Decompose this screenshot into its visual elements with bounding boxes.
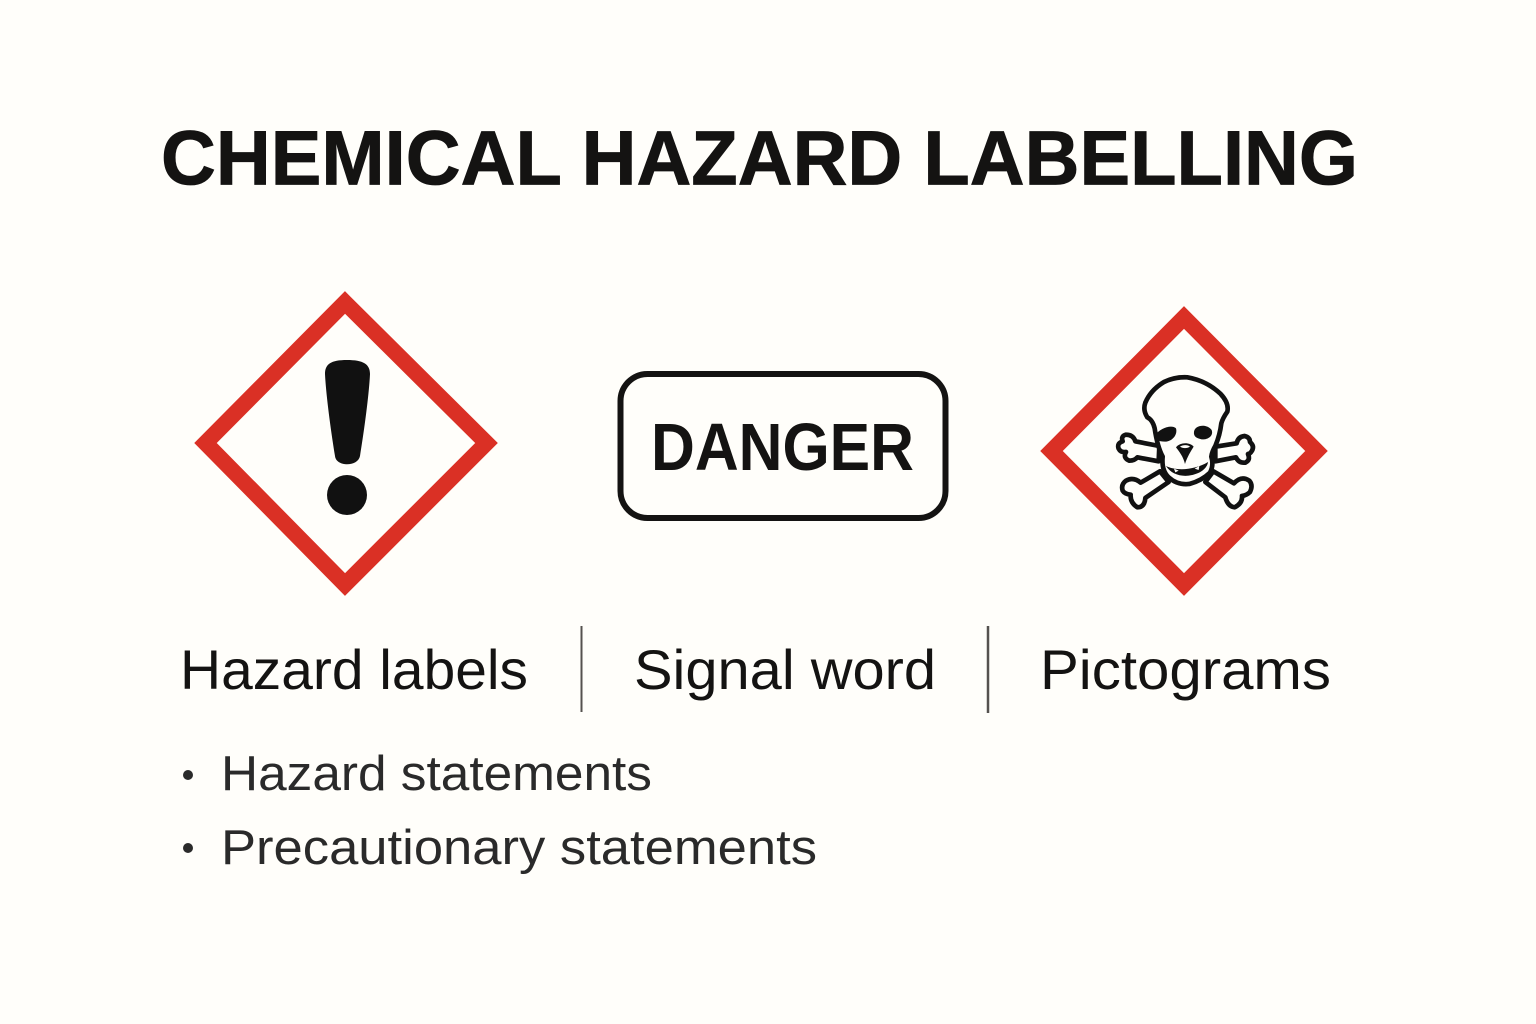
upper right bone [1215,436,1253,463]
skull mouth [1166,462,1208,476]
lower right bone [1205,471,1252,507]
signal word box: DANGER: DANGER [651,410,914,485]
bullet: hazard statements: Hazard statements [221,747,652,801]
lower left bone [1122,471,1169,507]
skull eyes [1155,427,1176,442]
upper left bone [1118,435,1159,461]
label: pictograms: Pictograms [1040,638,1331,701]
title: CHEMICAL HAZARD LABELLING [161,116,1358,202]
label: signal word: Signal word [634,638,936,701]
icon: skull and crossbones diamond [1052,318,1316,584]
skull outline [1144,377,1228,484]
skull nose [1176,443,1194,464]
icon: exclamation hazard diamond [206,302,486,584]
signal word box: DANGER [620,374,946,518]
label: hazard labels: Hazard labels [180,638,528,701]
bullet: precautionary statements: Precautionary statements [221,821,817,875]
